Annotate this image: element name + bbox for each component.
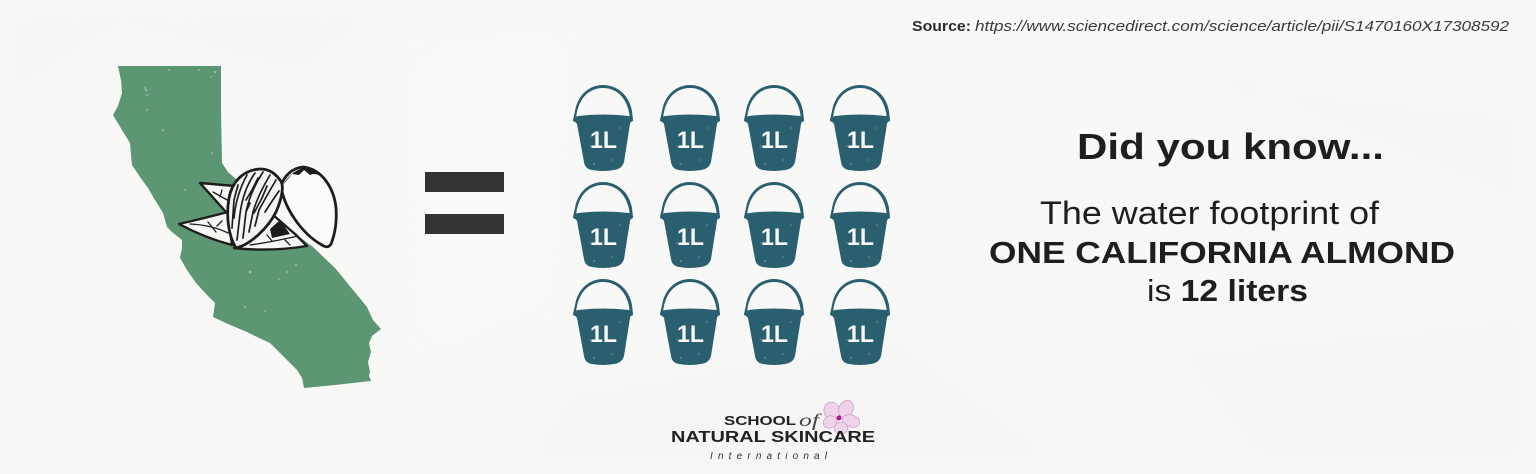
bucket row 1: 1L — [847, 127, 874, 154]
text block: did you know fact — [989, 126, 1455, 308]
bucket row 3: 1L — [590, 321, 617, 348]
smooth almond — [281, 167, 336, 247]
bucket row 2: 1L — [847, 224, 874, 251]
upper-left leaf — [200, 183, 235, 214]
logo: School of Natural Skincare International: International — [710, 451, 828, 462]
map of California with almonds — [113, 66, 381, 388]
bucket row 2: 1L — [677, 224, 704, 251]
icon: pink flower — [821, 398, 861, 435]
bucket row 2: 1L — [761, 224, 788, 251]
source citation: https://www.sciencedirect.com/science/article/pii/S1470160X17308592 — [975, 19, 1509, 35]
logo: School of Natural Skincare International: SCHOOL — [724, 414, 796, 428]
source citation: Source: — [912, 19, 971, 35]
equals sign — [425, 172, 504, 234]
bucket grid: twelve 1 litre buckets — [573, 85, 890, 365]
bucket row 3: 1L — [677, 321, 704, 348]
map speckles — [144, 69, 297, 312]
icon: almonds and leaves — [179, 167, 336, 250]
bucket row 1: 1L — [590, 127, 617, 154]
bucket row 3: 1L — [761, 321, 788, 348]
bucket row 1 — [573, 85, 890, 171]
California shape — [113, 66, 381, 388]
logo: School of Natural Skincare International — [671, 398, 875, 462]
bucket row 1: 1L — [761, 127, 788, 154]
bucket row 1: 1L — [677, 127, 704, 154]
bucket row 3 — [573, 279, 890, 365]
fact line 2: ONE CALIFORNIA ALMOND — [989, 235, 1455, 270]
logo: School of Natural Skincare International: of — [799, 410, 823, 430]
logo: School of Natural Skincare International: NATURAL SKINCARE — [671, 429, 875, 446]
fact line 1: The water footprint of — [1040, 195, 1379, 231]
striped almond — [228, 169, 282, 248]
bucket row 2 — [573, 182, 890, 268]
fact line 3: is 12 liters — [1147, 273, 1308, 308]
bucket row 3: 1L — [847, 321, 874, 348]
lower-right leaf — [234, 214, 307, 250]
bucket row 2: 1L — [590, 224, 617, 251]
heading: Did you know... — [1077, 126, 1384, 167]
lower-left leaf — [179, 212, 232, 245]
